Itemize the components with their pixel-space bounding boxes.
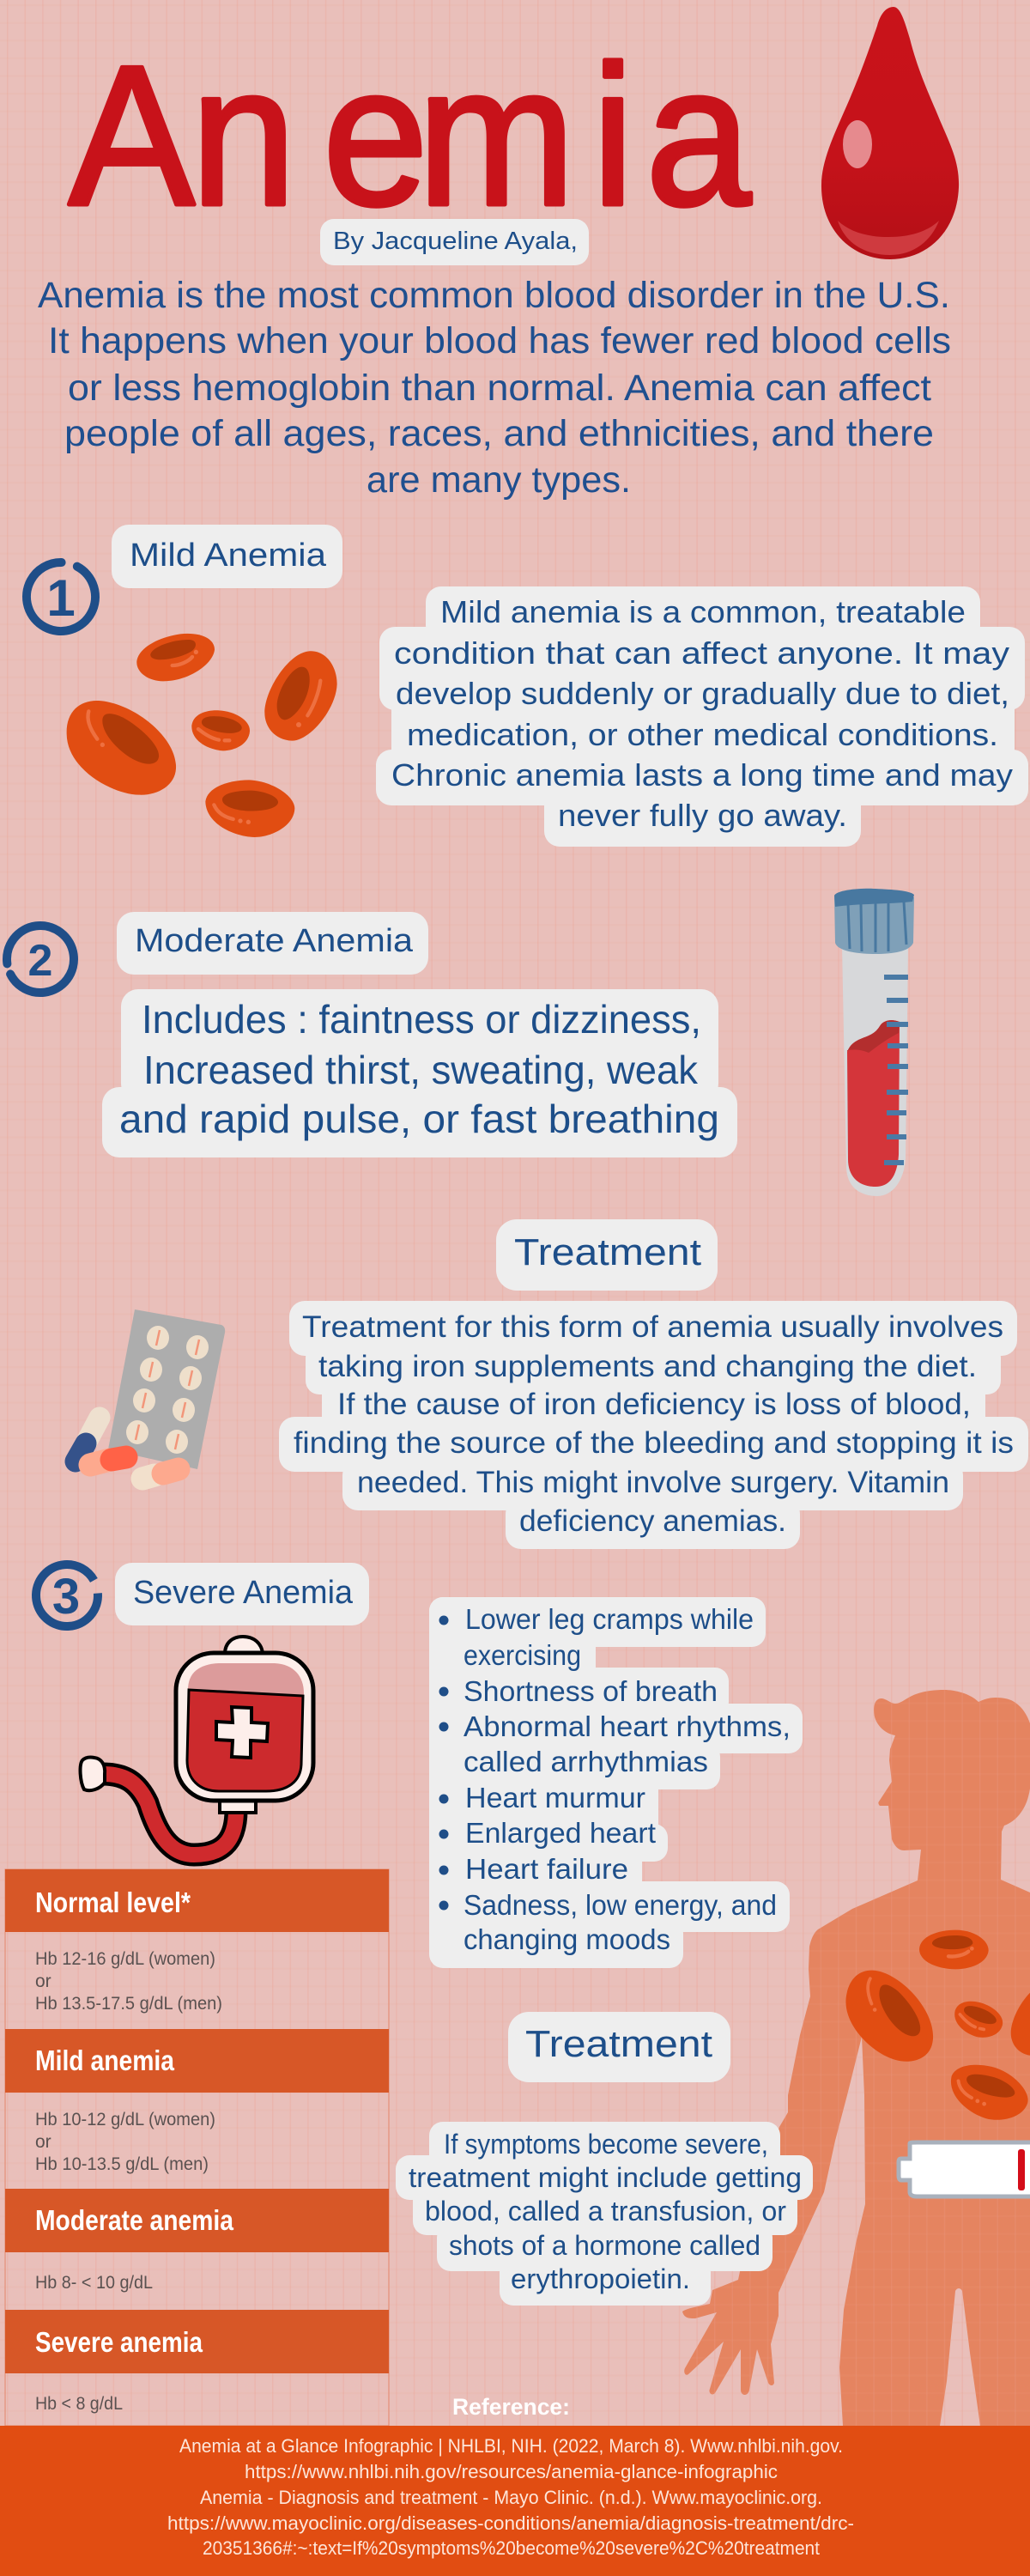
section 1 number badge: 1 <box>46 569 76 627</box>
heading: Mild Anemia <box>112 525 342 588</box>
footer: references: Anemia at a Glance Infographic | NHLBI, NIH. (2022, March 8). Www.nhlbi.nih.gov. <box>179 2435 843 2457</box>
section 1 number badge <box>15 550 107 643</box>
text block: severe anemia treatment: erythropoietin. <box>511 2263 690 2294</box>
cell: large <box>834 1965 946 2068</box>
table row: moderate anemia <box>5 2189 389 2293</box>
heading: Treatment (severe) <box>508 2012 730 2082</box>
text block: mild anemia description: Mild anemia is a common, treatable <box>440 594 966 629</box>
text block: moderate anemia symptoms: Increased thirst, sweating, weak <box>143 1048 699 1092</box>
illustration: human body silhouette <box>682 1690 1030 2426</box>
intro text: people of all ages, races, and ethnicities, and there <box>64 413 934 454</box>
illustration: red blood cells <box>67 634 337 837</box>
table row: severe anemia: Severe anemia <box>35 2326 203 2358</box>
cell: large left <box>67 701 176 795</box>
cell: chest top <box>919 1930 989 1969</box>
heading: Treatment: Treatment <box>514 1231 701 1273</box>
list: severe anemia symptoms: Heart failure <box>465 1853 628 1885</box>
list: severe anemia symptoms: Heart murmur <box>465 1782 645 1814</box>
heading: Severe Anemia <box>115 1563 369 1625</box>
table row: normal level: Normal level* <box>35 1886 191 1918</box>
cell: right edge <box>1011 1984 1030 2056</box>
table row: severe anemia: Hb < 8 g/dL <box>35 2394 123 2414</box>
table row: mild anemia: Hb 10-13.5 g/dL (men) <box>35 2154 209 2174</box>
list: severe anemia symptoms: Abnormal heart rhythms, <box>464 1710 791 1742</box>
list: severe anemia symptoms <box>429 1597 803 1968</box>
intro text <box>38 275 951 501</box>
text block: mild anemia description: medication, or other medical conditions. <box>407 717 998 752</box>
list: severe anemia symptoms: Enlarged heart <box>465 1817 656 1849</box>
table: hemoglobin levels <box>5 1869 389 2426</box>
list: severe anemia symptoms: changing moods <box>464 1923 670 1955</box>
text block: severe anemia treatment: treatment might include getting <box>409 2162 802 2193</box>
footer: references: https://www.nhlbi.nih.gov/resources/anemia-glance-infographic <box>245 2461 778 2482</box>
footer: references: Anemia - Diagnosis and treatment - Mayo Clinic. (n.d.). Www.mayoclinic.org. <box>200 2487 822 2508</box>
table row: normal level: Hb 12-16 g/dL (women) <box>35 1949 215 1969</box>
heading: Moderate Anemia: Moderate Anemia <box>135 923 414 959</box>
cell: right <box>264 651 337 741</box>
text block: mild anemia description <box>376 586 1028 847</box>
section 3 number badge: 3 <box>52 1569 80 1625</box>
heading: Treatment (severe): Treatment <box>525 2023 712 2065</box>
text block: moderate anemia treatment: finding the source of the bleeding and stopping it is <box>294 1426 1014 1460</box>
text block: severe anemia treatment: blood, called a transfusion, or <box>425 2196 786 2227</box>
list: severe anemia symptoms: called arrhythmias <box>464 1746 708 1777</box>
cells inside body <box>834 1930 1030 2128</box>
cell: small <box>951 1998 1006 2042</box>
list: severe anemia symptoms: Shortness of breath <box>464 1675 718 1707</box>
icon: pills and blister pack <box>76 1309 225 1479</box>
intro text: It happens when your blood has fewer red blood cells <box>48 320 951 361</box>
footer: references: 20351366#:~:text=If%20symptoms%20become%20severe%2C%20treatment <box>203 2537 820 2559</box>
table row: mild anemia: Hb 10-12 g/dL (women) <box>35 2110 215 2129</box>
text block: severe anemia treatment: shots of a hormone called <box>449 2230 760 2261</box>
heading: Treatment <box>496 1219 718 1291</box>
section 2 number badge: 2 <box>28 936 52 986</box>
intro text: are many types. <box>367 459 631 501</box>
table row: moderate anemia: Hb 8- < 10 g/dL <box>35 2273 153 2293</box>
footer: references <box>0 2426 1030 2576</box>
table row: moderate anemia: Moderate anemia <box>35 2204 234 2236</box>
intro text: Anemia is the most common blood disorder in the U.S. <box>38 275 950 316</box>
text block: moderate anemia treatment: deficiency anemias. <box>519 1504 786 1538</box>
text block: moderate anemia treatment: needed. This might involve surgery. Vitamin <box>357 1466 949 1499</box>
heading: Severe Anemia: Severe Anemia <box>133 1575 354 1611</box>
table row: normal level: or <box>35 1971 52 1991</box>
heading: Reference: Reference: <box>452 2394 570 2420</box>
list: severe anemia symptoms: exercising <box>464 1639 581 1671</box>
icon: blood transfusion bag <box>81 1637 313 1855</box>
footer: references: https://www.mayoclinic.org/diseases-conditions/anemia/diagnosis-treatment/drc- <box>167 2512 854 2534</box>
text block: mild anemia description: develop suddenly or gradually due to diet, <box>396 676 1009 711</box>
table row: mild anemia <box>5 2029 389 2174</box>
author badge <box>320 219 589 265</box>
table row: severe anemia <box>5 2310 389 2414</box>
text block: moderate anemia symptoms <box>102 989 737 1157</box>
text block: moderate anemia treatment <box>279 1301 1028 1549</box>
text block: moderate anemia treatment: Treatment for this form of anemia usually involves <box>302 1310 1003 1344</box>
text block: mild anemia description: Chronic anemia lasts a long time and may <box>391 757 1013 793</box>
list: severe anemia symptoms: Sadness, low energy, and <box>464 1889 777 1921</box>
text block: severe anemia treatment: If symptoms become severe, <box>444 2129 768 2160</box>
text block: mild anemia description: never fully go away. <box>558 798 847 833</box>
section 3 number badge <box>34 1563 100 1628</box>
icon: blood drop <box>821 7 959 259</box>
table row: mild anemia: or <box>35 2132 52 2152</box>
text block: severe anemia treatment <box>396 2122 813 2306</box>
table row: normal level: Hb 13.5-17.5 g/dL (men) <box>35 1994 222 2014</box>
text block: moderate anemia treatment: If the cause of iron deficiency is loss of blood, <box>337 1388 971 1421</box>
text block: moderate anemia symptoms: Includes : faintness or dizziness, <box>142 997 701 1042</box>
icon: low battery <box>899 2142 1030 2196</box>
heading: Mild Anemia: Mild Anemia <box>130 538 327 574</box>
icon: test tube with blood <box>834 889 914 1196</box>
cell: bottom <box>205 780 294 837</box>
list: severe anemia symptoms: Lower leg cramps while <box>465 1603 754 1635</box>
section 2 number badge <box>3 921 78 997</box>
table row: normal level <box>5 1869 389 2014</box>
cell: center <box>191 710 250 750</box>
cell: lower <box>943 2057 1030 2128</box>
title: Anemia <box>69 24 751 246</box>
text block: mild anemia description: condition that can affect anyone. It may <box>394 635 1009 671</box>
intro text: or less hemoglobin than normal. Anemia can affect <box>68 368 931 409</box>
cell: top <box>136 634 215 681</box>
author badge: By Jacqueline Ayala, <box>333 228 578 255</box>
table row: mild anemia: Mild anemia <box>35 2044 175 2076</box>
heading: Moderate Anemia <box>117 912 428 975</box>
text block: moderate anemia treatment: taking iron supplements and changing the diet. <box>318 1350 977 1383</box>
text block: moderate anemia symptoms: and rapid pulse, or fast breathing <box>119 1097 719 1141</box>
